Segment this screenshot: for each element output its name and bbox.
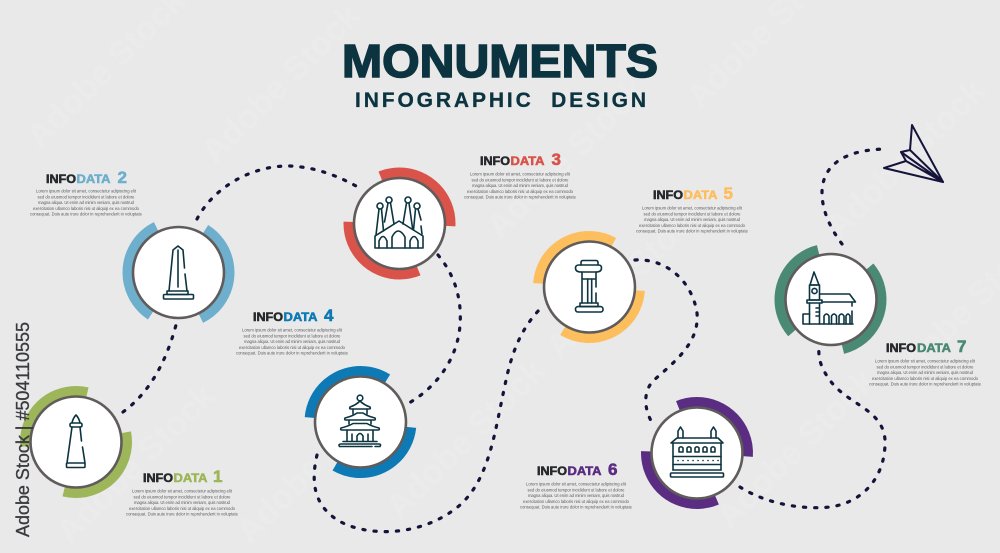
- text: Adobe Stock: [539, 192, 713, 366]
- text: Adobe Stock: [709, 362, 883, 536]
- heading: info data 6: 6: [608, 460, 617, 479]
- heading: info data 1: 1: [213, 467, 222, 486]
- text block 5: magna aliqua. Ut enim ad minim veniam, quis nostrud: [644, 217, 741, 222]
- dotted path: step 6 to 7: [740, 348, 885, 508]
- text block 2: Lorem ipsum dolor sit amet, consectetur adipiscing elit: [36, 188, 137, 194]
- icon: basilica: [375, 197, 423, 248]
- title: MONUMENTS: [342, 35, 658, 87]
- text block 7: [869, 358, 982, 387]
- heading: info data 5: DATA: [684, 188, 718, 202]
- icon: palace: [670, 427, 724, 477]
- heading: info data 7: INFO: [886, 341, 916, 355]
- step 3: [334, 158, 465, 289]
- heading: info data 7: [886, 337, 966, 356]
- heading: info data 4: 4: [324, 306, 334, 325]
- step 7: [760, 229, 901, 370]
- heading: info data 3: INFO: [480, 154, 510, 168]
- text block 6: sed do eiusmod tempor incididunt ut labore et dolore: [528, 487, 625, 492]
- circle: [786, 254, 876, 345]
- text block 2: sed do eiusmod tempor incididunt ut labore et dolore: [38, 194, 135, 199]
- heading: info data 3: DATA: [510, 154, 545, 168]
- heading: info data 4: INFO: [253, 310, 283, 324]
- heading: info data 4: DATA: [284, 310, 318, 324]
- text block 7: exercitation ullamco laboris nisi ut aliquip ex ea commodo: [872, 376, 979, 381]
- text block 2: [30, 188, 143, 217]
- icon: temple: [339, 395, 381, 446]
- icon: paper plane: [884, 125, 943, 182]
- ring: purple: [631, 387, 763, 519]
- heading: info data 6: DATA: [568, 464, 602, 478]
- heading: info data 2: [46, 168, 127, 187]
- heading: info data 3: 3: [552, 150, 561, 169]
- text block 3: [464, 172, 577, 200]
- text block 3: consequat. Duis aute irure dolor in reprehenderit in voluptate: [464, 195, 577, 200]
- heading: info data 6: INFO: [537, 464, 567, 478]
- heading: info data 1: INFO: [143, 471, 173, 485]
- dotted path: step 1 to 2: [123, 325, 176, 412]
- text block 3: Lorem ipsum dolor sit amet, consectetur adipiscing elit: [470, 172, 571, 176]
- circle: [315, 376, 406, 468]
- icon: tower: [66, 415, 85, 468]
- ring: red: [334, 158, 465, 289]
- text block 5: consequat. Duis aute irure dolor in reprehenderit in voluptate: [636, 229, 749, 234]
- text: Adobe Stock: [819, 72, 993, 246]
- ring: blue: [306, 367, 415, 477]
- heading: info data 6: [537, 460, 617, 479]
- stock id label: Adobe Stock | #504110555: [13, 322, 33, 537]
- dotted path: step 3 to 4: [409, 255, 460, 403]
- step 2: [109, 203, 248, 342]
- text block 1: Lorem ipsum dolor sit amet, consectetur adipiscing elit: [132, 488, 233, 494]
- heading: info data 1: [143, 467, 222, 486]
- text block 6: Lorem ipsum dolor sit amet, consectetur adipiscing elit: [526, 482, 627, 486]
- heading: info data 2: DATA: [76, 172, 111, 186]
- heading: info data 2: 2: [118, 168, 127, 187]
- dotted path: step 4 to 5: [314, 309, 540, 532]
- dotted path: step 7 to plane: [822, 149, 888, 244]
- circle: [133, 227, 224, 318]
- ring: green: [17, 383, 135, 501]
- circle: [354, 178, 445, 269]
- text block 2: consequat. Duis aute irure dolor in reprehenderit in voluptate: [30, 212, 143, 217]
- text block 4: sed do eiusmod tempor incididunt ut labore et dolore: [244, 333, 341, 338]
- text block 5: sed do eiusmod tempor incididunt ut labore et dolore: [644, 211, 741, 216]
- text block 6: magna aliqua. Ut enim ad minim veniam, quis nostrud: [528, 493, 625, 498]
- heading: info data 5: 5: [724, 184, 733, 203]
- text block 4: consequat. Duis aute irure dolor in reprehenderit in voluptate: [236, 351, 349, 356]
- text block 4: Lorem ipsum dolor sit amet, consectetur adipiscing elit: [242, 328, 343, 332]
- text block 3: sed do eiusmod tempor incididunt ut labore et dolore: [472, 177, 569, 182]
- text: Adobe Stock: [379, 352, 553, 526]
- text block 7: consequat. Duis aute irure dolor in reprehenderit in voluptate: [869, 382, 982, 387]
- text block 1: sed do eiusmod tempor incididunt ut labore et dolore: [134, 494, 231, 499]
- circle: [652, 408, 742, 498]
- text block 3: magna aliqua. Ut enim ad minim veniam, quis nostrud: [472, 183, 569, 188]
- text block 5: exercitation ullamco laboris nisi ut aliquip ex ea commodo: [639, 223, 746, 228]
- text block 1: exercitation ullamco laboris nisi ut aliquip ex ea commodo: [129, 506, 236, 511]
- text block 1: magna aliqua. Ut enim ad minim veniam, quis nostrud: [134, 500, 231, 505]
- text block 6: [520, 482, 633, 510]
- dotted path: step 5 to 6: [635, 260, 697, 426]
- step 4: [306, 367, 415, 477]
- text block 7: Lorem ipsum dolor sit amet, consectetur adipiscing elit: [875, 358, 976, 364]
- text: Adobe Stock: [229, 377, 403, 551]
- heading: info data 4: [253, 306, 334, 325]
- heading: info data 2: INFO: [46, 172, 76, 186]
- icon: column: [576, 260, 603, 312]
- text block 5: Lorem ipsum dolor sit amet, consectetur adipiscing elit: [642, 206, 743, 210]
- heading: info data 1: DATA: [174, 471, 208, 485]
- text block 5: [636, 206, 749, 234]
- heading: info data 3: [480, 150, 561, 169]
- text block 2: exercitation ullamco laboris nisi ut aliquip ex ea commodo: [33, 206, 140, 211]
- text block 1: consequat. Duis aute irure dolor in reprehenderit in voluptate: [126, 512, 239, 517]
- text block 1: [126, 488, 239, 517]
- text: Adobe Stock: [479, 72, 653, 246]
- ring: light blue: [109, 203, 248, 342]
- text block 4: exercitation ullamco laboris nisi ut aliquip ex ea commodo: [239, 345, 346, 350]
- text block 2: magna aliqua. Ut enim ad minim veniam, quis nostrud: [38, 200, 135, 205]
- step 1: [17, 383, 135, 501]
- circle: [30, 396, 122, 488]
- ring: green: [760, 229, 901, 370]
- text block 7: magna aliqua. Ut enim ad minim veniam, quis nostrud: [877, 370, 974, 375]
- heading: info data 7: DATA: [917, 341, 951, 355]
- dotted path: step 2 to 3: [197, 166, 356, 219]
- step 5: [536, 234, 642, 340]
- circle: [544, 242, 635, 332]
- heading: info data 5: [653, 184, 733, 203]
- text: Adobe Stock: [49, 377, 223, 551]
- text block 6: exercitation ullamco laboris nisi ut aliquip ex ea commodo: [523, 499, 630, 504]
- text block 4: [236, 328, 349, 356]
- icon: church: [803, 272, 856, 324]
- text block 6: consequat. Duis aute irure dolor in reprehenderit in voluptate: [520, 505, 633, 510]
- text: Adobe Stock: [194, 0, 368, 171]
- text block 7: sed do eiusmod tempor incididunt ut labore et dolore: [876, 364, 974, 369]
- step 6: [631, 387, 763, 519]
- heading: info data 7: 7: [957, 337, 966, 356]
- ring: yellow: [536, 234, 642, 340]
- heading: info data 5: INFO: [653, 188, 683, 202]
- text block 4: magna aliqua. Ut enim ad minim veniam, quis nostrud: [244, 339, 341, 344]
- icon: obelisk: [164, 246, 194, 299]
- text block 3: exercitation ullamco laboris nisi ut aliquip ex ea commodo: [467, 189, 574, 194]
- subtitle: INFOGRAPHIC DESIGN: [355, 89, 646, 112]
